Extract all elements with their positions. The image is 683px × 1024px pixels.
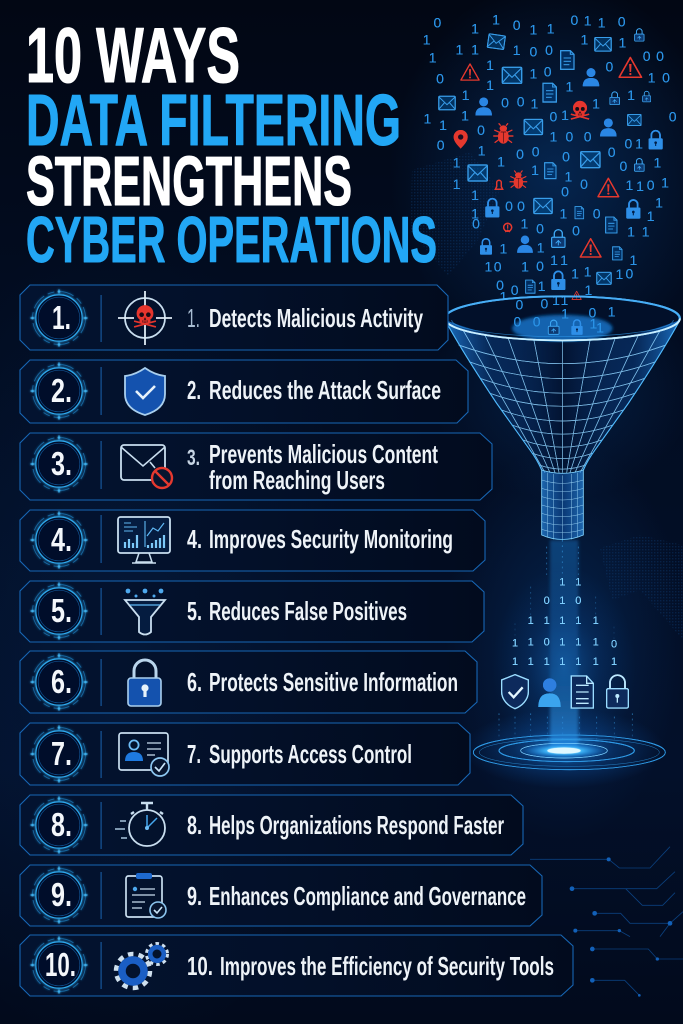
title: STRENGTHENS bbox=[26, 142, 352, 220]
stream glow bbox=[492, 567, 636, 767]
label 5: Reduces False Positives bbox=[209, 596, 407, 626]
title: 10 WAYS bbox=[26, 11, 240, 99]
badge number 9: 9. bbox=[51, 876, 72, 913]
badge number 6: 6. bbox=[51, 663, 72, 700]
label 9: Enhances Compliance and Governance bbox=[209, 881, 526, 911]
filtered data stream below the funnel bbox=[464, 540, 665, 788]
badge number 7: 7. bbox=[51, 735, 72, 772]
label 2: Reduces the Attack Surface bbox=[209, 375, 441, 405]
label 10: 10. bbox=[187, 951, 213, 981]
label 1: 1. bbox=[187, 303, 200, 333]
label 4: 4. bbox=[187, 524, 202, 554]
label 3: from Reaching Users bbox=[209, 465, 385, 495]
icon: envelope blocked bbox=[121, 445, 172, 488]
label 3: Prevents Malicious Content bbox=[209, 439, 438, 469]
document icons bbox=[526, 51, 622, 293]
label 6: 6. bbox=[187, 667, 202, 697]
label 4: Improves Security Monitoring bbox=[209, 524, 453, 554]
label 7: Supports Access Control bbox=[209, 739, 412, 769]
funnel bbox=[432, 280, 683, 540]
label 6 bbox=[187, 667, 458, 697]
binary digits: 1001111011 bbox=[423, 87, 635, 126]
panel 6 bbox=[20, 651, 477, 713]
binary digits: 0110110110 bbox=[433, 11, 626, 37]
funnel cone bbox=[445, 320, 680, 470]
holographic platform bbox=[464, 708, 665, 788]
label 2: 2. bbox=[187, 375, 201, 405]
badge number 4: 4. bbox=[51, 521, 72, 558]
badge number 3: 3. bbox=[51, 445, 72, 482]
title: CYBER OPERATIONS bbox=[26, 203, 437, 276]
icon: target with skull bbox=[118, 291, 172, 345]
panel 3 bbox=[20, 433, 492, 500]
label 3 bbox=[187, 439, 438, 495]
warning triangles bbox=[461, 57, 641, 257]
binary digits: 0000111011 bbox=[453, 144, 661, 192]
funnel grid bbox=[459, 331, 666, 473]
panel 9 bbox=[20, 865, 542, 926]
icon: stopwatch bbox=[115, 803, 165, 846]
title bbox=[26, 11, 437, 276]
icon: padlock bbox=[607, 675, 628, 708]
panel 8 bbox=[20, 795, 523, 855]
binary digits: 0100101101 bbox=[436, 48, 670, 95]
icon: shield bbox=[502, 675, 528, 709]
binary columns: 110101111111011101111111 bbox=[512, 577, 617, 668]
panel 5 bbox=[20, 581, 484, 642]
icon: document bbox=[571, 676, 593, 708]
binary digits: 110100111 bbox=[496, 252, 637, 305]
badge number 2: 2. bbox=[51, 372, 72, 409]
icon: padlock bbox=[128, 660, 161, 706]
label 5: 5. bbox=[187, 596, 202, 626]
funnel edges bbox=[445, 320, 680, 470]
funnel glow bbox=[432, 280, 683, 500]
funnel rim front bbox=[445, 318, 680, 340]
binary digits: 1001000101 bbox=[437, 109, 677, 159]
icon: ID card with check bbox=[119, 733, 169, 776]
label 8: Helps Organizations Respond Faster bbox=[209, 810, 504, 840]
label 9: 9. bbox=[187, 881, 202, 911]
label 8: 8. bbox=[187, 810, 202, 840]
label 1: Detects Malicious Activity bbox=[209, 303, 423, 333]
binary digits bbox=[423, 11, 677, 305]
envelope icons bbox=[439, 34, 641, 284]
icon: monitor with charts bbox=[118, 517, 170, 563]
faint world map bbox=[410, 152, 683, 640]
stream lines bbox=[499, 540, 632, 753]
label 10 bbox=[187, 951, 554, 981]
circuit traces bbox=[530, 847, 683, 997]
label 9 bbox=[187, 881, 526, 911]
label 5 bbox=[187, 596, 407, 626]
panel 4 bbox=[20, 510, 485, 571]
label 7 bbox=[187, 739, 412, 769]
label 6: Protects Sensitive Information bbox=[209, 667, 458, 697]
data stream of icons and binary digits bbox=[423, 11, 677, 305]
badge number 8: 8. bbox=[51, 806, 72, 843]
label 8 bbox=[187, 810, 504, 840]
funnel neck bbox=[542, 470, 583, 540]
icon: filter funnel bbox=[125, 589, 165, 634]
central light beam bbox=[550, 540, 578, 750]
badge number 5: 5. bbox=[51, 592, 72, 629]
binary digits: 1011011000 bbox=[471, 169, 669, 214]
panel 1 bbox=[20, 285, 448, 350]
panel 7 bbox=[20, 723, 470, 785]
binary digits: 1111110101 bbox=[484, 208, 655, 281]
panel 10 bbox=[20, 935, 573, 996]
icon: clipboard with check bbox=[126, 873, 166, 918]
badge number 10: 10. bbox=[45, 946, 76, 983]
label 3: 3. bbox=[187, 445, 200, 470]
binary digits: 1111100110 bbox=[423, 31, 651, 65]
icon: shield with check bbox=[125, 368, 165, 415]
badge number 1: 1. bbox=[52, 299, 71, 336]
title: DATA FILTERING bbox=[26, 81, 401, 161]
binary digits: 1101010011 bbox=[471, 195, 663, 240]
lock icons bbox=[480, 29, 663, 290]
label 2 bbox=[187, 375, 441, 405]
label 1 bbox=[187, 303, 423, 333]
icon: gears bbox=[116, 944, 168, 988]
digits entering the funnel: 00110110011 bbox=[513, 292, 616, 336]
malware icons bbox=[454, 101, 589, 232]
panel 2 bbox=[20, 360, 468, 423]
label 4 bbox=[187, 524, 453, 554]
label 7: 7. bbox=[187, 739, 201, 769]
funnel rim back bbox=[445, 296, 680, 340]
icon: user bbox=[538, 678, 561, 707]
user icons bbox=[475, 68, 617, 253]
